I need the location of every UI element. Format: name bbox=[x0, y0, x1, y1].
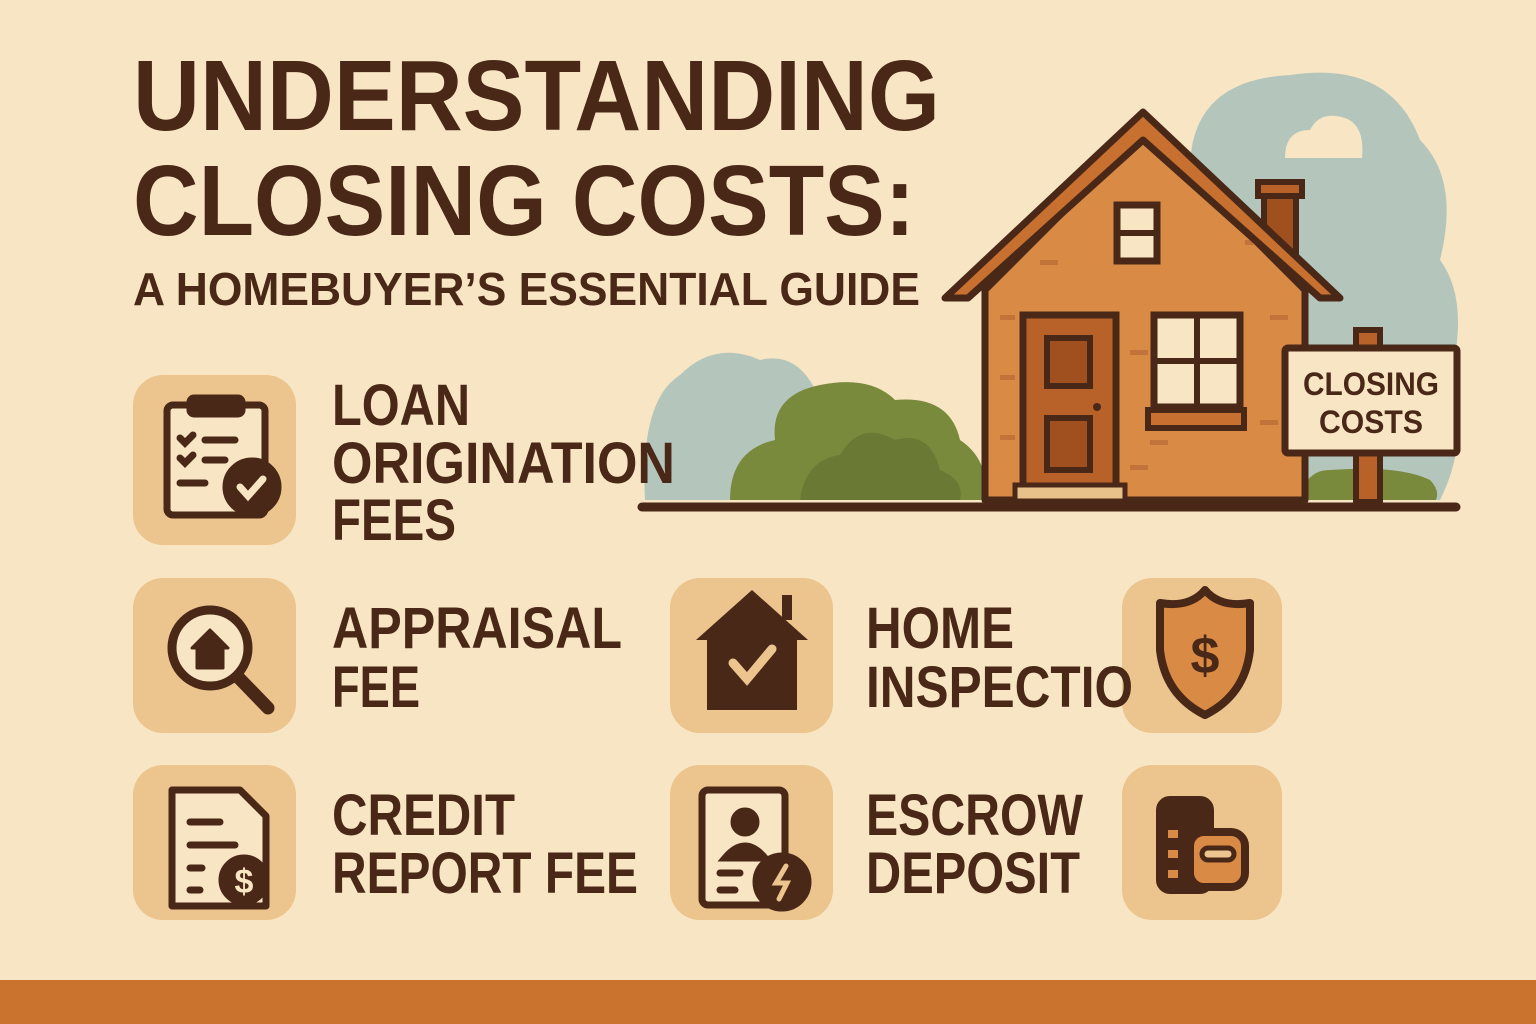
item: credit report fee: CREDIT bbox=[332, 783, 515, 848]
icon: document dollar bbox=[172, 790, 266, 906]
item: escrow deposit: DEPOSIT bbox=[866, 841, 1080, 906]
icon: shield dollar bbox=[1160, 590, 1250, 715]
icon: clipboard bbox=[167, 398, 278, 515]
sign post bbox=[1356, 330, 1380, 502]
icon: magnifier with house bbox=[172, 610, 268, 708]
cloud left bbox=[644, 353, 820, 500]
window bbox=[1154, 315, 1240, 407]
item: credit report fee: REPORT FEE bbox=[332, 841, 638, 906]
subtitle: A HOMEBUYER’S ESSENTIAL GUIDE bbox=[133, 263, 920, 315]
item: home inspection: HOME bbox=[866, 596, 1014, 661]
attic window bbox=[1117, 205, 1157, 261]
item: home inspection bbox=[670, 578, 1133, 733]
item: credit report fee bbox=[133, 765, 638, 920]
icon: stacked cash bbox=[1160, 800, 1245, 890]
icon: house with check bbox=[696, 590, 808, 710]
sign bbox=[1285, 348, 1457, 453]
title: UNDERSTANDING bbox=[133, 40, 940, 152]
item: escrow deposit bbox=[670, 765, 1083, 920]
illustration: house scene bbox=[642, 73, 1458, 507]
item: appraisal fee: FEE bbox=[332, 655, 420, 720]
item: loan origination fees: LOAN bbox=[332, 373, 470, 438]
item: coin stack icon bbox=[1122, 765, 1282, 920]
bush bbox=[730, 382, 986, 500]
item: loan origination fees bbox=[133, 373, 675, 553]
item: escrow deposit: ESCROW bbox=[866, 783, 1083, 848]
item: credit report fee: $ bbox=[235, 863, 254, 901]
icon: id card bolt bbox=[702, 790, 808, 908]
icon: shield dollar: $ bbox=[1191, 627, 1220, 685]
item: home inspection: INSPECTIO bbox=[866, 655, 1133, 720]
item: shield icon bbox=[1122, 578, 1282, 733]
title: CLOSING COSTS: bbox=[133, 145, 915, 257]
house body bbox=[985, 130, 1305, 500]
title bbox=[133, 40, 940, 257]
roof bbox=[945, 112, 1340, 298]
item: appraisal fee: APPRAISAL bbox=[332, 596, 622, 661]
footer bar bbox=[0, 980, 1536, 1024]
door bbox=[1023, 315, 1116, 487]
ground line bbox=[642, 502, 1456, 512]
item: loan origination fees: FEES bbox=[332, 488, 456, 553]
cloud right bbox=[1190, 73, 1458, 500]
item: appraisal fee bbox=[133, 578, 622, 733]
sign: COSTS bbox=[1319, 404, 1423, 440]
item: loan origination fees: ORIGINATION bbox=[332, 431, 675, 496]
sign: CLOSING bbox=[1303, 366, 1439, 402]
chimney bbox=[1264, 190, 1296, 270]
